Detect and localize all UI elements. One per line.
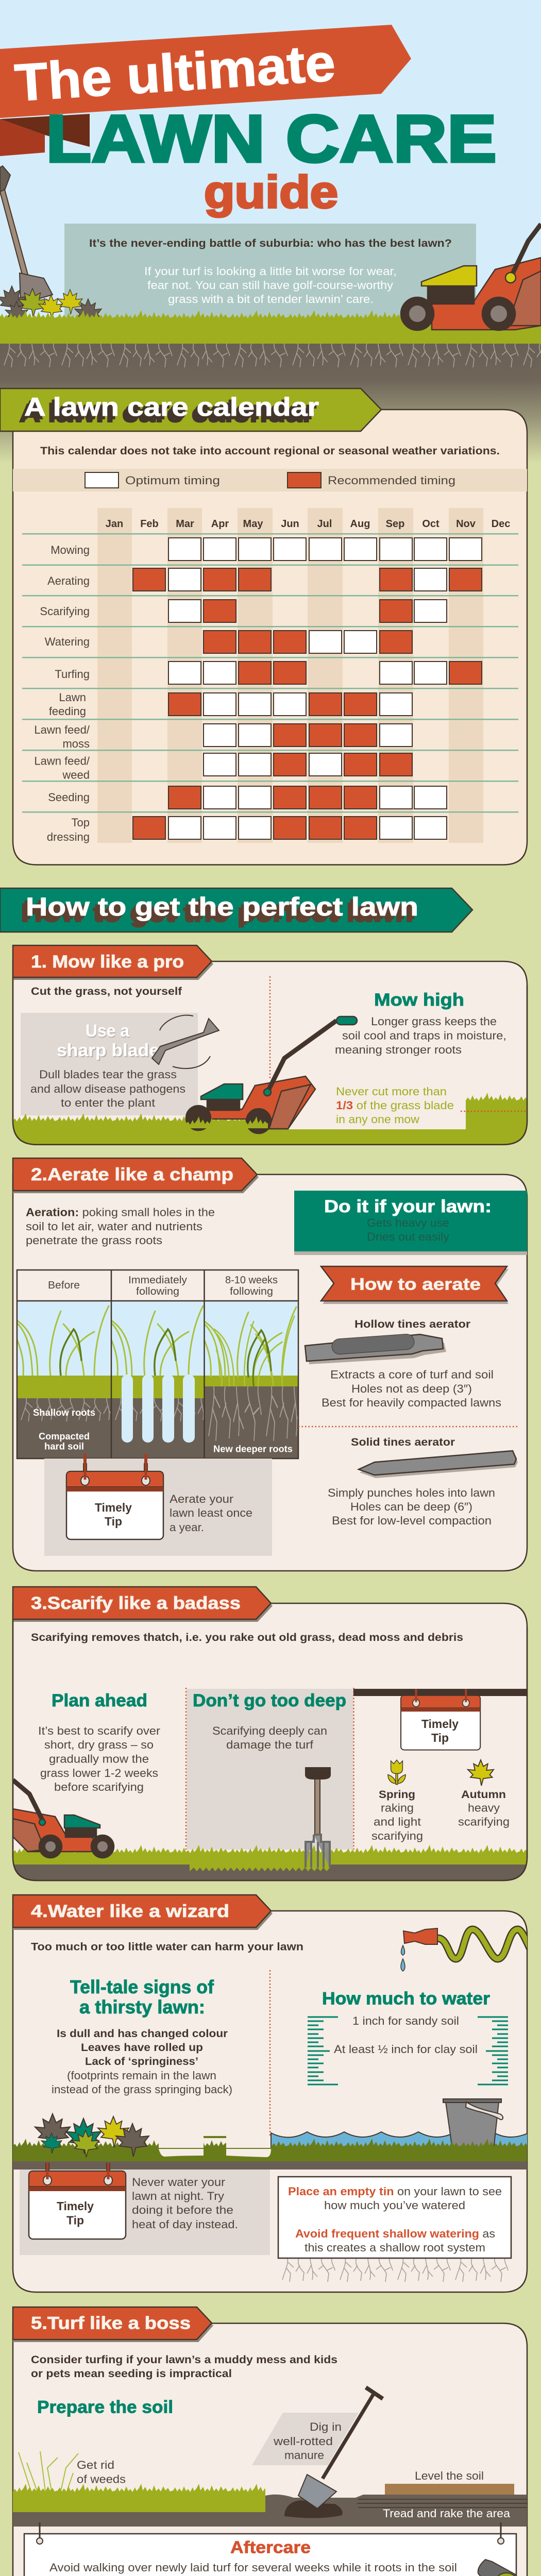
grass strip: [0, 310, 541, 344]
tip: timely scarifying seasons: [353, 1689, 527, 1842]
month labels: Jan: [106, 518, 123, 530]
intro box: If your turf is looking a little bit worse for wear,: [144, 265, 397, 278]
icon: dirt pile: [284, 2500, 343, 2518]
callout: empty tin and shallow watering: Place an empty tin on your lawn to see: [288, 2185, 502, 2198]
row: top dressing: [133, 817, 447, 839]
title: LAWN CARE: LAWN CARE: [46, 101, 497, 176]
row labels: Top: [72, 816, 90, 829]
ground and mower illustration: [13, 1016, 528, 1145]
subtitle: or pets mean seeding is impractical: [31, 2368, 232, 2380]
tip: aerate yearly: Tip: [105, 1515, 122, 1528]
intro box: It’s the never-ending battle of suburbia: who has the best lawn?: [89, 238, 452, 249]
heading: a lawn care calendar: [0, 388, 381, 431]
soil comparison table: [14, 1270, 298, 1459]
hollow tines aerator: [305, 1318, 501, 1409]
row: scarifying: [168, 600, 447, 622]
heading: a lawn care calendar: A lawn care calendar: [19, 399, 314, 428]
column: tell-tale signs: a thirsty lawn:: [79, 1996, 205, 2018]
section header 1: 1. Mow like a pro: [31, 952, 184, 972]
row labels: Mowing: [50, 544, 90, 556]
section header 5: 5.Turf like a boss: [31, 2313, 191, 2333]
month labels: Dec: [492, 518, 510, 530]
row: turfing: [168, 662, 482, 684]
row: lawn feeding: [168, 693, 412, 716]
section header 3: 3.Scarify like a badass: [31, 1594, 241, 1613]
labels: preparation steps: well-rotted: [273, 2435, 333, 2448]
heading: how to get the perfect lawn: How to get the perfect lawn: [21, 899, 413, 927]
ground, mower and fork: [13, 1768, 527, 1881]
section header 3: [13, 1587, 273, 1622]
soil comparison table: following: [136, 1286, 179, 1297]
tip: aerate yearly: lawn least once: [170, 1506, 252, 1519]
month labels: Jul: [317, 518, 332, 530]
icon: garden fork and leaves: [0, 166, 102, 326]
icon: garden fork: [306, 1768, 330, 1868]
panel: 1 mow like a pro: [13, 945, 528, 1145]
legend: Recommended timing: [328, 474, 455, 487]
soil comparison table: Compacted: [39, 1431, 90, 1442]
column: plan ahead: before scarifying: [54, 1781, 144, 1793]
ribbon: how to aerate: How to aerate: [350, 1275, 481, 1293]
callout: do it if your lawn: [294, 1191, 527, 1255]
text: never cut more than one third: Never cut more than: [336, 1085, 447, 1098]
tip: never water at night: Tip: [66, 2213, 84, 2227]
callout: empty tin and shallow watering: [278, 2177, 511, 2284]
title: guide: guide: [204, 166, 338, 217]
row labels: Lawn feed/: [34, 723, 90, 736]
hollow tines aerator: Best for heavily compacted lawns: [322, 1396, 501, 1409]
soil comparison table: New deeper roots: [213, 1444, 293, 1454]
labels: preparation steps: of weeds: [77, 2473, 126, 2485]
tip: sharp blade: and allow disease pathogens: [30, 1082, 185, 1095]
section header 4: [13, 1895, 273, 1930]
text: longer grass: Longer grass keeps the: [371, 1015, 497, 1028]
hollow tines aerator: Holes not as deep (3″): [351, 1382, 472, 1395]
solid tines aerator: Simply punches holes into lawn: [328, 1486, 495, 1499]
row labels: dressing: [47, 831, 90, 843]
subtitle: Too much or too little water can harm your lawn: [31, 1941, 303, 1953]
subtitle: [31, 2354, 337, 2380]
callout: do it if your lawn: Gets heavy use: [367, 1216, 449, 1229]
heading: how to get the perfect lawn: How to get the perfect lawn: [26, 892, 418, 921]
weeds: [19, 2451, 78, 2491]
text: never cut more than one third: in any one mow: [336, 1113, 419, 1126]
hollow tines aerator: Hollow tines aerator: [354, 1318, 470, 1330]
row labels: feeding: [49, 705, 86, 718]
subtitle: Consider turfing if your lawn’s a muddy mess and kids: [31, 2354, 337, 2366]
tip: timely scarifying seasons: scarifying: [371, 1829, 423, 1842]
legend: [13, 469, 527, 492]
heading: mow high: Mow high: [374, 990, 464, 1010]
tip: sharp blade: Use a: [86, 1021, 130, 1041]
row labels: Lawn: [59, 691, 86, 704]
row labels: Seeding: [48, 791, 90, 804]
column: tell-tale signs: (footprints remain in the lawn: [67, 2069, 216, 2082]
tip: never water at night: heat of day instead.: [132, 2218, 238, 2231]
tip: aerate yearly: Aerate your: [170, 1493, 233, 1505]
text: longer grass: meaning stronger roots: [335, 1043, 462, 1056]
ground illustration: water, bucket, leaves: [13, 2099, 531, 2170]
calendar note: This calendar does not take into account regional or seasonal weather variations.: [40, 445, 500, 457]
section header 2: 2.Aerate like a champ: [31, 1165, 233, 1184]
ground illustration: [13, 2387, 527, 2527]
soil comparison table: hard soil: [44, 1442, 84, 1452]
month labels: Aug: [350, 518, 370, 530]
hero section: [0, 0, 541, 464]
section header 5: [13, 2307, 213, 2342]
icon: mower: [186, 1016, 357, 1133]
column: plan ahead: gradually mow the: [49, 1753, 149, 1765]
icon: mower: [13, 1780, 114, 1858]
tip: sharp blade: to enter the plant: [61, 1096, 155, 1109]
month labels: Oct: [422, 518, 439, 530]
solid tines aerator: Best for low-level compaction: [332, 1514, 492, 1527]
sign: aftercare: [24, 2522, 520, 2576]
month labels: Nov: [456, 518, 476, 530]
row: seeding: [168, 786, 447, 809]
soil comparison table: Shallow roots: [33, 1408, 95, 1418]
text: aeration definition: penetrate the grass roots: [26, 1234, 162, 1247]
tip: sharp blade: sharp blade: [58, 1042, 160, 1061]
tip: sharp blade: sharp blade: [57, 1041, 159, 1060]
text: longer grass: soil cool and traps in moisture,: [342, 1029, 506, 1042]
row: aerating: [133, 568, 482, 591]
tip: never water at night: Timely: [57, 2199, 94, 2213]
ribbon: how to aerate: [321, 1266, 509, 1304]
sign: aftercare: Aftercare: [230, 2538, 311, 2556]
column: don't go too deep: damage the turf: [226, 1738, 314, 1751]
text: aeration definition: soil to let air, water and nutrients: [26, 1220, 202, 1233]
text: never cut more than one third: 1/3 of the grass blade: [336, 1099, 454, 1112]
row labels: Aerating: [47, 574, 90, 587]
row: lawn feed weed: [204, 753, 412, 776]
middle column background: [187, 1689, 353, 1850]
row labels: weed: [62, 769, 90, 781]
title: The ultimate: The ultimate: [13, 33, 337, 112]
text: aeration definition: Aeration: poking small holes in the: [26, 1206, 215, 1219]
month labels: Feb: [140, 518, 159, 530]
month column stripes: [97, 508, 483, 843]
tip: never water at night: lawn at night. Try: [132, 2190, 224, 2202]
column: how much to water: How much to water: [322, 1989, 490, 2008]
text: never cut more than one third: [336, 1085, 454, 1126]
solid tines aerator: Holes can be deep (6″): [350, 1500, 472, 1513]
column: how much to water: At least ½ inch for clay soil: [334, 2043, 478, 2056]
column: don't go too deep: [193, 1691, 346, 1751]
icon: turf roll: [478, 2560, 520, 2576]
ground illustration: Tread and rake the area: [383, 2507, 511, 2520]
column: tell-tale signs: Lack of ‘springiness’: [85, 2056, 198, 2067]
soil comparison table: following: [230, 1286, 273, 1297]
hollow tines aerator: Extracts a core of turf and soil: [330, 1368, 494, 1381]
intro box: [64, 224, 476, 321]
callout: empty tin and shallow watering: this creates a shallow root system: [305, 2241, 485, 2254]
subtitle: Cut the grass, not yourself: [31, 986, 182, 997]
section header 2: [13, 1158, 259, 1193]
soil comparison table: 8-10 weeks: [225, 1275, 278, 1286]
column: plan ahead: short, dry grass – so: [44, 1738, 154, 1751]
row: lawn feed moss: [204, 724, 412, 747]
ruler right: [478, 2017, 508, 2084]
heading: how to get the perfect lawn: [0, 888, 472, 932]
soil comparison table: Immediately: [128, 1275, 187, 1286]
panel: 2 aerate like a champ: [13, 1158, 527, 1571]
labels: preparation steps: Level the soil: [415, 2469, 484, 2482]
sign: aftercare: Avoid walking over newly laid turf for several weeks while it roots in the soil: [49, 2561, 457, 2574]
callout: do it if your lawn: Do it if your lawn:: [324, 1197, 492, 1216]
ruler left: [308, 2017, 338, 2084]
month labels: Apr: [211, 518, 229, 530]
soil comparison table: Before: [48, 1280, 80, 1291]
row labels: Scarifying: [40, 605, 90, 618]
labels: preparation steps: Dig in: [310, 2420, 342, 2433]
icon: leaf pile: [35, 2114, 149, 2157]
legend: Optimum timing: [125, 474, 220, 487]
row labels: moss: [62, 737, 90, 750]
column: how much to water: [308, 1989, 508, 2084]
tip: sharp blade: [21, 1013, 198, 1115]
callout: do it if your lawn: Dries out easily: [367, 1230, 449, 1243]
title ribbon: [0, 25, 411, 118]
subtitle: Scarifying removes thatch, i.e. you rake out old grass, dead moss and debris: [31, 1632, 463, 1643]
panel: 3 scarify like a badass: [13, 1587, 527, 1881]
intro box: fear not. You can still have golf-course-worthy: [147, 279, 393, 292]
tip: timely scarifying seasons: scarifying: [458, 1816, 510, 1828]
column: plan ahead: Plan ahead: [52, 1691, 147, 1710]
panel: lawn care calendar: [0, 388, 527, 865]
month labels: May: [243, 518, 263, 530]
tip: timely scarifying seasons: and light: [374, 1816, 421, 1828]
tip: never water at night: doing it before the: [132, 2204, 233, 2216]
text: longer grass: [335, 1015, 506, 1056]
tip: timely scarifying seasons: raking: [381, 1801, 414, 1815]
row divider lines: [22, 533, 518, 813]
month labels: Mar: [176, 518, 194, 530]
tip: timely scarifying seasons: Timely: [421, 1717, 459, 1731]
icon: hose: [401, 1928, 531, 1971]
row labels: Lawn feed/: [34, 754, 90, 768]
solid tines aerator: Solid tines aerator: [351, 1436, 455, 1448]
text: aeration definition: [26, 1206, 215, 1247]
heading: how to get the perfect lawn: How to get the perfect lawn: [23, 895, 416, 924]
heading: a lawn care calendar: A lawn care calendar: [24, 393, 319, 421]
column: plan ahead: grass lower 1-2 weeks: [40, 1767, 158, 1780]
row labels: Turfing: [55, 668, 90, 681]
panel: 5 turf like a boss: [13, 2307, 527, 2576]
tip: aerate yearly: a year.: [170, 1521, 204, 1534]
icon: bucket: [443, 2099, 503, 2149]
column: plan ahead: It’s best to scarify over: [38, 1724, 160, 1737]
month labels: [106, 518, 510, 530]
panel: 4 water like a wizard: [13, 1895, 531, 2292]
callout: empty tin and shallow watering: how much you’ve watered: [324, 2199, 465, 2212]
month labels: Sep: [386, 518, 404, 530]
tip: sharp blade: Use a: [86, 1022, 130, 1042]
row: watering: [204, 631, 412, 653]
icon: spade: [298, 2387, 383, 2509]
heading: prepare the soil: Prepare the soil: [37, 2398, 173, 2417]
section header 4: 4.Water like a wizard: [31, 1902, 229, 1921]
tip: timely scarifying seasons: Spring: [379, 1789, 415, 1801]
tip: timely scarifying seasons: Autumn: [461, 1789, 506, 1801]
title ribbon fold: [0, 114, 90, 156]
column: don't go too deep: Don’t go too deep: [193, 1691, 346, 1710]
tip: timely scarifying seasons: Tip: [431, 1731, 449, 1744]
solid tines aerator: [328, 1436, 518, 1527]
roots: [0, 344, 541, 369]
intro box: grass with a bit of tender lawnin’ care.: [168, 293, 374, 306]
tip: timely scarifying seasons: heavy: [468, 1801, 500, 1815]
labels: preparation steps: Get rid: [77, 2459, 114, 2471]
tip: aerate yearly: Timely: [95, 1501, 132, 1514]
heading: a lawn care calendar: A lawn care calendar: [22, 396, 316, 425]
row labels: [34, 544, 90, 843]
column: tell-tale signs: Is dull and has changed colour: [57, 2028, 228, 2040]
column: plan ahead: [38, 1691, 160, 1793]
tip: never water at night: [20, 2163, 270, 2255]
labels: preparation steps: [77, 2420, 484, 2485]
column: tell-tale signs: Leaves have rolled up: [81, 2042, 203, 2054]
column: don't go too deep: Scarifying deeply can: [212, 1724, 327, 1737]
row labels: Watering: [45, 635, 90, 648]
column: how much to water: 1 inch for sandy soil: [352, 2014, 459, 2027]
tip: aerate yearly: [44, 1454, 272, 1556]
column: tell-tale signs: [52, 1976, 232, 2096]
tip: sharp blade: Dull blades tear the grass: [39, 1068, 177, 1081]
manure label background: [252, 2413, 359, 2465]
tip: never water at night: Never water your: [132, 2176, 225, 2189]
callout: empty tin and shallow watering: Avoid frequent shallow watering as: [295, 2227, 495, 2240]
section header 1: [13, 945, 213, 980]
icon: lawn mower: [401, 224, 541, 330]
row: mowing: [168, 538, 482, 561]
month labels: Jun: [281, 518, 299, 530]
column: tell-tale signs: instead of the grass springing back): [52, 2083, 232, 2096]
labels: preparation steps: manure: [284, 2449, 324, 2462]
icon: mower blade: [152, 1015, 219, 1069]
column: tell-tale signs: Tell-tale signs of: [70, 1976, 214, 1997]
